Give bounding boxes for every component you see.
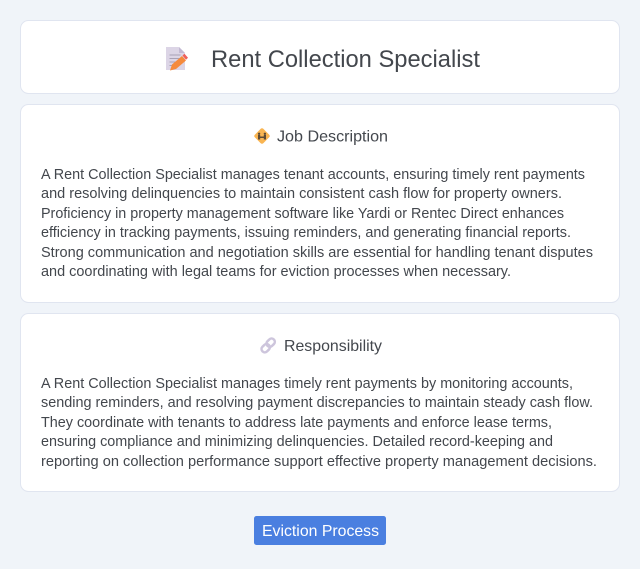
text block: job description: Strong communication and negotiation skills are essential for handling tenant disputes bbox=[41, 245, 593, 261]
text block: job description: A Rent Collection Specialist manages tenant accounts, ensuring timely rent payments bbox=[41, 167, 585, 183]
button: eviction process bbox=[254, 516, 386, 545]
text block: responsibility: reporting on collection performance support effective property management decisions. bbox=[41, 454, 597, 470]
panel: responsibility bbox=[20, 314, 620, 492]
text block: responsibility bbox=[41, 376, 597, 470]
heading: responsibility: Responsibility bbox=[284, 338, 382, 355]
panel: title card bbox=[20, 20, 620, 94]
icon: document with pencil bbox=[166, 47, 188, 70]
text block: job description bbox=[41, 167, 593, 280]
text block: job description: efficiency in tracking payments, issuing reminders, and generating financial reports. bbox=[41, 225, 571, 241]
text block: responsibility: sending reminders, and resolving payment discrepancies to maintain steady cash flow. bbox=[41, 395, 593, 411]
icon: chain link bbox=[260, 337, 276, 354]
text block: responsibility: A Rent Collection Specialist manages timely rent payments by monitoring accounts, bbox=[41, 376, 573, 392]
button: eviction process: Eviction Process bbox=[262, 523, 379, 540]
text block: job description: and coordinating with legal teams for eviction processes when necessary. bbox=[41, 264, 511, 280]
icon: orange diamond sign bbox=[254, 128, 270, 144]
heading: job description: Job Description bbox=[277, 128, 388, 146]
panel: job description bbox=[20, 104, 620, 302]
text block: responsibility: They coordinate with tenants to address late payments and enforce lease terms, bbox=[41, 415, 552, 431]
text block: job description: Proficiency in property management software like Yardi or Rentec Direct enhances bbox=[41, 206, 564, 222]
text block: job description: and resolving delinquencies to maintain consistent cash flow for property owners. bbox=[41, 186, 562, 202]
title: Rent Collection Specialist bbox=[211, 46, 480, 73]
text block: responsibility: ensuring compliance and minimizing delinquencies. Detailed record-keeping and bbox=[41, 434, 553, 450]
